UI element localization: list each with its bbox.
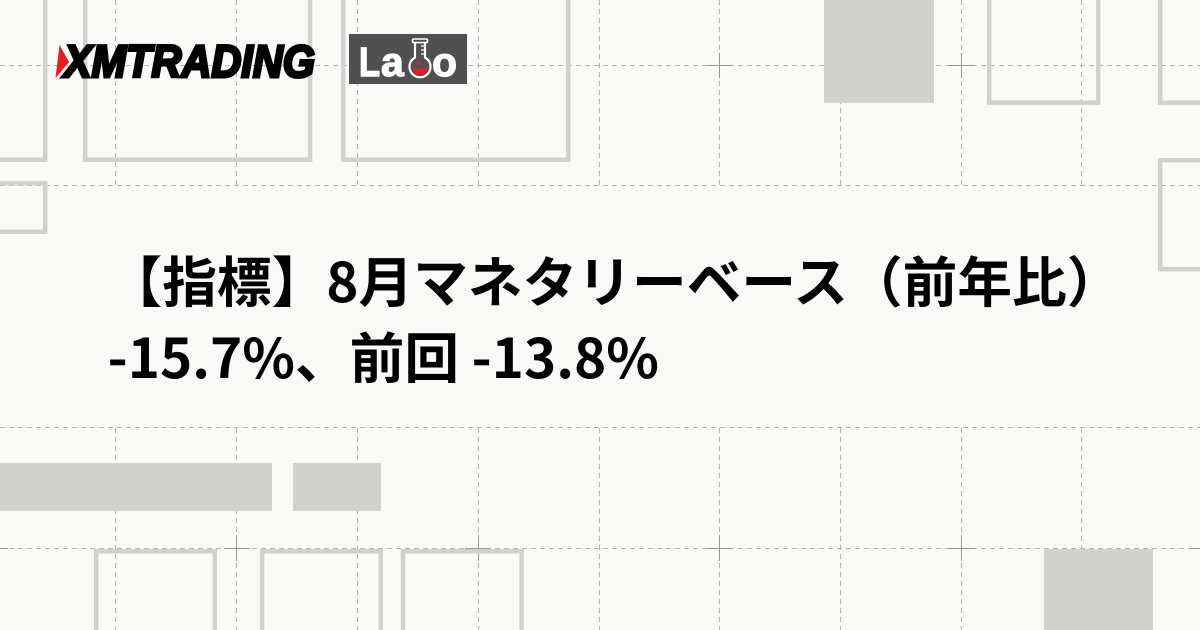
title: -15.7%、前回 -13.8% [108, 315, 659, 394]
icon: flask [410, 39, 430, 77]
logo letters: L [359, 39, 380, 84]
logo: Lab: a [381, 39, 405, 84]
title: 【指標】8月マネタリーベース（前年比） [108, 239, 1121, 318]
logo: XMTRADING [56, 36, 316, 87]
logo: Lab: o [432, 39, 457, 84]
title [108, 239, 1121, 394]
icon: red arrow mark [56, 45, 69, 78]
logo background [349, 34, 467, 84]
logo: Lab [349, 34, 467, 84]
